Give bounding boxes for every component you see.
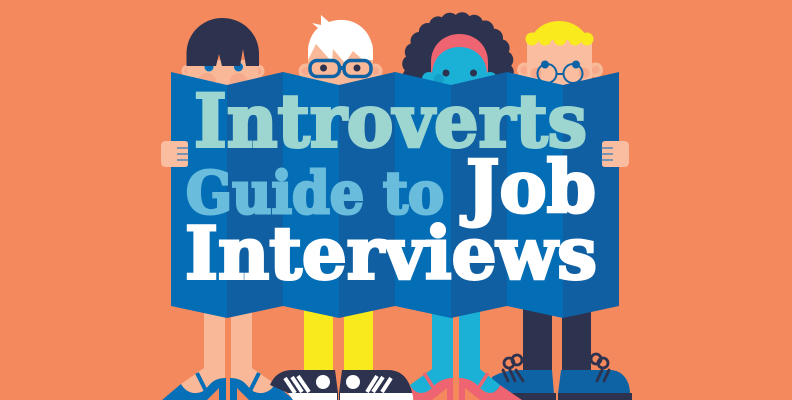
title: Job: Job [460, 144, 596, 229]
character 2 head [298, 15, 382, 86]
left hand [161, 141, 188, 167]
character 3 head [402, 12, 514, 115]
right hand [602, 141, 629, 167]
title: Introverts: Introverts [194, 78, 587, 164]
character 1 head [182, 18, 264, 91]
character 2 legs and shoes [270, 300, 413, 400]
title: Interviews: Interviews [185, 210, 597, 296]
folded blue map [171, 72, 619, 318]
character 3 legs and shoes [410, 300, 522, 400]
character 4 head [517, 21, 603, 88]
title: Guide to: Guide to [186, 159, 444, 227]
character 4 legs and shoes [492, 300, 632, 400]
character 1 legs and shoes [162, 300, 294, 400]
